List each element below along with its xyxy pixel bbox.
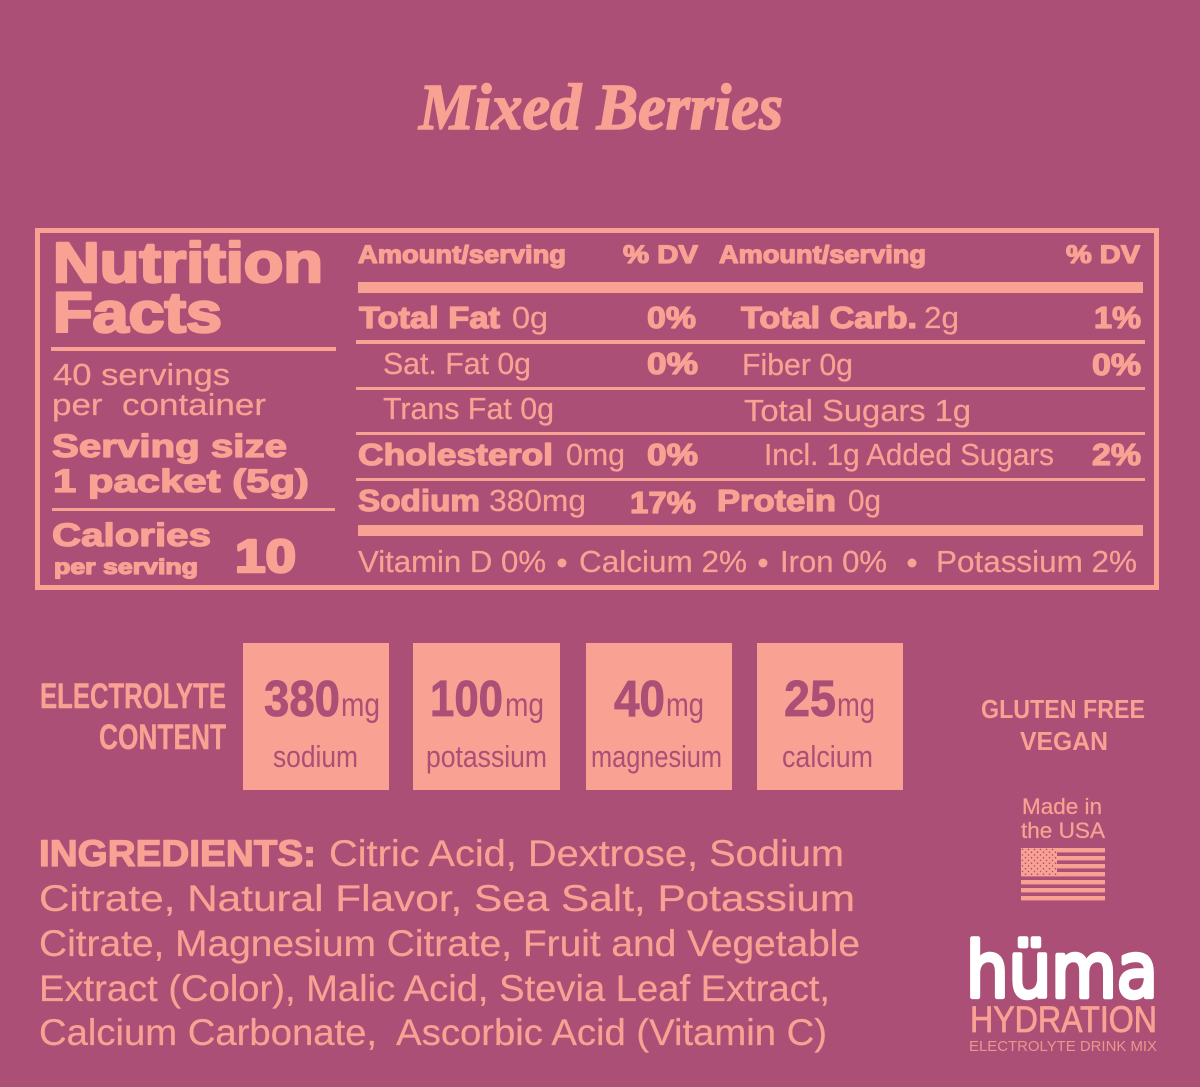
row: sat fat and fiber: 0% (1092, 347, 1141, 382)
row: total fat and total carb: Total Fat (359, 300, 500, 335)
row: vitamins and minerals: Potassium 2% (936, 544, 1137, 579)
heading: electrolyte content: CONTENT (99, 718, 226, 757)
claims: gluten free and vegan: GLUTEN FREE (981, 694, 1145, 724)
title: Mixed Berries (418, 71, 783, 144)
row: trans fat and total sugars: Total Sugars 1g (744, 393, 971, 428)
card: magnesium: 40 (614, 670, 665, 727)
claims: gluten free and vegan: VEGAN (1020, 726, 1108, 756)
servings per container: 40 servings (53, 357, 230, 392)
ingredients (39, 833, 860, 1053)
card: calcium (757, 643, 903, 790)
row: sat fat and fiber: Sat. Fat 0g (383, 346, 531, 381)
card: sodium (243, 643, 389, 790)
table header: % DV (623, 241, 698, 269)
ingredients: Citrate, Magnesium Citrate, Fruit and Vegetable (39, 923, 860, 964)
row: sat fat and fiber (383, 346, 1141, 382)
servings per container: per container (52, 387, 266, 422)
card: magnesium: magnesium (591, 739, 722, 774)
card: calcium: mg (837, 686, 875, 723)
row: cholesterol and added sugars: 0% (647, 437, 698, 472)
card: potassium: mg (505, 686, 544, 723)
calories (52, 517, 296, 582)
card: calcium: calcium (782, 739, 873, 774)
icon: american flag (1021, 848, 1105, 900)
table header: Amount/serving (358, 241, 566, 269)
ingredients: Calcium Carbonate, Ascorbic Acid (Vitamin C) (39, 1012, 827, 1053)
servings per container (52, 357, 266, 422)
row: vitamins and minerals: Vitamin D 0% (358, 544, 546, 579)
row: cholesterol and added sugars: Cholesterol (358, 437, 553, 472)
row: cholesterol and added sugars: Incl. 1g Added Sugars (764, 437, 1054, 472)
row: total fat and total carb: Total Carb. (741, 300, 917, 335)
heading: electrolyte content: ELECTROLYTE (40, 677, 226, 716)
row: cholesterol and added sugars (358, 437, 1141, 472)
row: total fat and total carb: 0% (647, 300, 696, 335)
row: sodium and protein: 17% (630, 485, 696, 520)
heading: nutrition facts (53, 231, 323, 345)
logo: huma hydration: ELECTROLYTE DRINK MIX (969, 1038, 1157, 1055)
ingredients: Extract (Color), Malic Acid, Stevia Leaf Extract, (39, 968, 830, 1009)
row: sodium and protein: Protein (717, 483, 836, 518)
ingredients: Citric Acid, Dextrose, Sodium (329, 833, 844, 874)
row: sat fat and fiber: Fiber 0g (742, 347, 853, 382)
row: vitamins and minerals (358, 544, 1137, 579)
card: calcium: 25 (784, 670, 836, 727)
serving size: Serving size (52, 428, 287, 464)
row: total fat and total carb: 2g (924, 300, 959, 335)
heading: nutrition facts: Nutrition (53, 231, 323, 295)
row: trans fat and total sugars: Trans Fat 0g (383, 391, 554, 426)
claims: gluten free and vegan (981, 694, 1145, 756)
logo: huma hydration (966, 927, 1158, 1055)
row: sat fat and fiber: 0% (647, 346, 698, 381)
row: sodium and protein (358, 483, 881, 520)
row: total fat and total carb: 1% (1094, 300, 1141, 335)
row: sodium and protein: 0g (848, 483, 881, 518)
card: sodium: 380 (264, 670, 340, 727)
card: potassium (413, 643, 560, 790)
logo: huma hydration: HYDRATION (970, 999, 1157, 1040)
heading: electrolyte content (40, 677, 226, 757)
table header (358, 241, 1140, 269)
made in the USA: Made in (1022, 794, 1102, 819)
made in the USA: the USA (1021, 818, 1105, 843)
table header: Amount/serving (719, 241, 926, 269)
card: potassium: potassium (426, 739, 547, 774)
ingredients: INGREDIENTS: (39, 833, 316, 874)
heading: nutrition facts: Facts (53, 281, 222, 345)
row: vitamins and minerals: Iron 0% (780, 544, 887, 579)
table header: % DV (1066, 241, 1140, 269)
card: magnesium (586, 643, 732, 790)
row: total fat and total carb: 0g (512, 300, 548, 335)
row: vitamins and minerals: Calcium 2% (579, 544, 747, 579)
row: sodium and protein: 380mg (489, 483, 586, 518)
calories: Calories (52, 517, 211, 553)
logo: huma hydration: hüma (966, 927, 1158, 1016)
card: sodium: sodium (273, 739, 358, 774)
panel: nutrition facts (38, 230, 1156, 588)
ingredients: Citrate, Natural Flavor, Sea Salt, Potassium (39, 878, 855, 919)
row: cholesterol and added sugars: 2% (1092, 437, 1141, 472)
calories: per serving (54, 556, 198, 579)
calories: 10 (235, 530, 296, 582)
serving size (52, 428, 309, 499)
made in the USA (1021, 794, 1105, 843)
serving size: 1 packet (5g) (53, 463, 309, 499)
row: cholesterol and added sugars: 0mg (566, 437, 625, 472)
card: magnesium: mg (666, 686, 704, 723)
row: trans fat and total sugars (383, 391, 971, 428)
card: potassium: 100 (430, 670, 503, 727)
card: sodium: mg (341, 686, 380, 723)
row: total fat and total carb (359, 300, 1141, 335)
row: sodium and protein: Sodium (358, 483, 480, 518)
